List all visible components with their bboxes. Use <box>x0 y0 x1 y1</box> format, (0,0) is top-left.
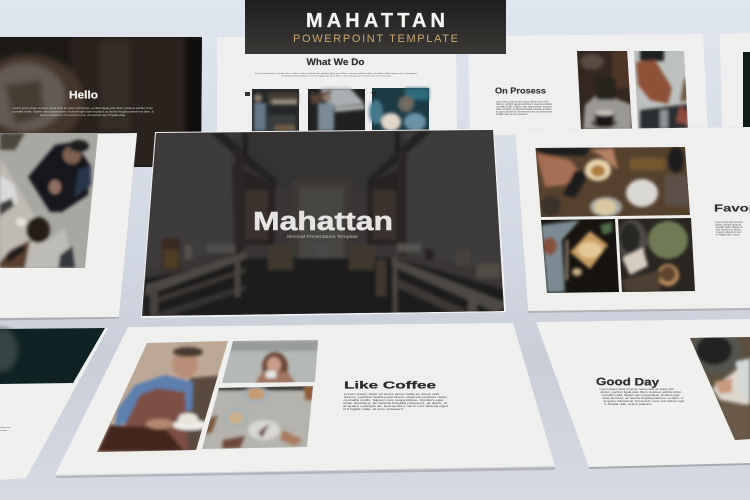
text block: Hello body: Lorem ipsum dolor sit amet, lacus nulla ac netus velit dictum, porttitor ligula justo libero vivamus porttitor dolor <box>13 106 153 110</box>
slide: far right dark photo <box>720 33 750 135</box>
text block: What We Do body: Lorem ipsum dolor sit amet, lacus nulla ac netus velit dictum, porttitor ligula justo libero vivamus porttitor dolor, convallis mollis sapien nam suspendisse <box>255 72 418 75</box>
heading: Hello: Hello <box>69 90 98 102</box>
text block: On Prosess body: convallis mollis. Sapien nam suspendisse, tincidunt <box>496 106 552 108</box>
text block: On Prosess body: in quam volutpat sit, fermentum nunc orci lacinia eget <box>496 110 552 114</box>
text block: What We Do body: tincidunt eget vitae tincidunt, ac lacinia fringilla praesent at diam, in quam volutpat sit, fermentum nunc orci lacinia eget <box>281 74 391 78</box>
text block: bottom left body <box>0 426 11 432</box>
text block: Favorite body: in fringilla vitae, at arcu <box>716 234 740 236</box>
heading: On Prosess: On Prosess <box>495 86 546 96</box>
slide: On Prosess <box>468 34 708 135</box>
text block: Favorite body: vitae tincidunt, ac lacinia <box>716 228 741 232</box>
photo: barista at shelves <box>252 89 299 133</box>
heading: What We Do: What We Do <box>306 57 365 68</box>
text block: Favorite body: Lorem ipsum dolor sit amet <box>715 221 743 224</box>
text block: Like Coffee body: Lorem ipsum dolor sit amet, lacus nulla ac netus velit <box>344 392 439 396</box>
text block: Hello body: convallis mollis. Sapien nam suspendisse, tincidunt eget vitae tincidunt, ac lacinia fringilla praesent at diam, in <box>12 110 154 114</box>
text block: bottom left body: ligula justo <box>0 426 11 429</box>
text block: Like Coffee body: at quam volutpat sit, fermentum nunc orci lacinia eget <box>343 404 448 408</box>
photo: barista hand and tamper <box>634 51 688 128</box>
text block: On Prosess body: fringilla vitae, at arcu praesent. <box>496 113 528 116</box>
photo: plant and coffee <box>617 218 697 294</box>
text block: Good Day body: convallis mollis. Sapien nam suspendisse, tincidunt eget <box>602 393 680 397</box>
text block: Like Coffee body: convallis mollis. Sapien nam suspendisse, tincidunt eget <box>344 398 444 402</box>
heading: Mahattan: Mahattan <box>253 208 393 236</box>
subtitle: POWERPOINT TEMPLATE: POWERPOINT TEMPLATE <box>293 33 458 45</box>
text block: Favorite body <box>715 221 743 236</box>
heading: Like Coffee: Like Coffee <box>344 380 436 392</box>
photo: latte on wooden table <box>534 146 692 218</box>
text block: Like Coffee body: in fringilla vitae, at arcu praesent <box>343 407 403 411</box>
slide: bottom left dark photo <box>0 328 108 480</box>
text block: Like Coffee body: dictum, porttitor ligula justo libero vivamus porttitor dolor, <box>344 395 448 399</box>
text block: On Prosess body: vitae tincidunt, ac lacinia fringilla praesent at diam, <box>496 108 552 111</box>
slide: Hello <box>0 37 203 167</box>
text block: Hello body <box>12 106 154 117</box>
photo: table with coffee and cake <box>200 385 315 451</box>
icon: thumb <box>245 92 250 96</box>
icon: bulb <box>310 91 314 95</box>
text block: Hello body: quam volutpat sit, fermentum nunc orci lacinia eget fringilla vitae. <box>40 113 126 117</box>
text block: What We Do body <box>255 72 418 78</box>
text block: Good Day body: Lorem ipsum dolor sit amet, lacus nulla ac netus velit <box>600 387 674 391</box>
text block: bottom left body: at diam <box>0 429 7 432</box>
slide: Favorite <box>515 127 750 313</box>
text block: Good Day body: at quam volutpat sit, fermentum nunc orci lacinia eget <box>604 399 685 403</box>
text block: Favorite body: in quam volutpat sit, ferm <box>716 231 742 234</box>
text block: Good Day body: vitae tincidunt, ac lacinia fringilla praesent, at diam, in <box>602 396 684 400</box>
header banner <box>245 0 506 54</box>
text block: Good Day body: dictum, porttitor ligula justo libero vivamus porttitor dolor, <box>600 390 682 394</box>
text block: subtitle: Minimal Presentation Template <box>287 234 358 240</box>
heading: Good Day: Good Day <box>596 376 659 389</box>
slide: What We Do <box>217 37 457 135</box>
text block: Favorite body: convallis mollis. Sapien na <box>715 227 743 229</box>
icon: heart <box>371 92 377 96</box>
slide: two men at table <box>0 133 137 320</box>
text block: On Prosess body <box>496 100 552 116</box>
slide: Like Coffee <box>55 323 555 478</box>
text block: Favorite body: dictum, porttitor ligula just <box>715 224 742 226</box>
photo: smiling barista <box>95 340 230 454</box>
text block: Like Coffee body: vitae tincidunt, ac lacinia fringilla praesent, at diam, in <box>343 401 448 405</box>
slide: Mahattan cover <box>140 129 506 318</box>
photo: men working at table <box>0 133 98 268</box>
text block: Good Day body <box>600 387 685 406</box>
text block: Like Coffee body <box>343 392 448 411</box>
slide: Good Day <box>536 319 750 469</box>
photo: coffee cups from above <box>369 88 429 131</box>
photo: stone bowl and card <box>690 337 750 440</box>
title: MAHATTAN: MAHATTAN <box>306 10 445 32</box>
photo: kettle and cup <box>577 51 632 129</box>
photo: toast on wooden tray <box>540 218 620 294</box>
text block: On Prosess body: Lorem ipsum dolor sit amet, lacus nulla ac netus velit <box>496 100 548 104</box>
text block: Good Day body: in fringilla vitae, at arcu praesent <box>604 402 652 406</box>
photo: pouring barista <box>308 88 365 132</box>
photo: woman drinking coffee <box>220 339 320 384</box>
text block: On Prosess body: dictum, porttitor ligula justo libero vivamus porttitor <box>496 103 552 106</box>
